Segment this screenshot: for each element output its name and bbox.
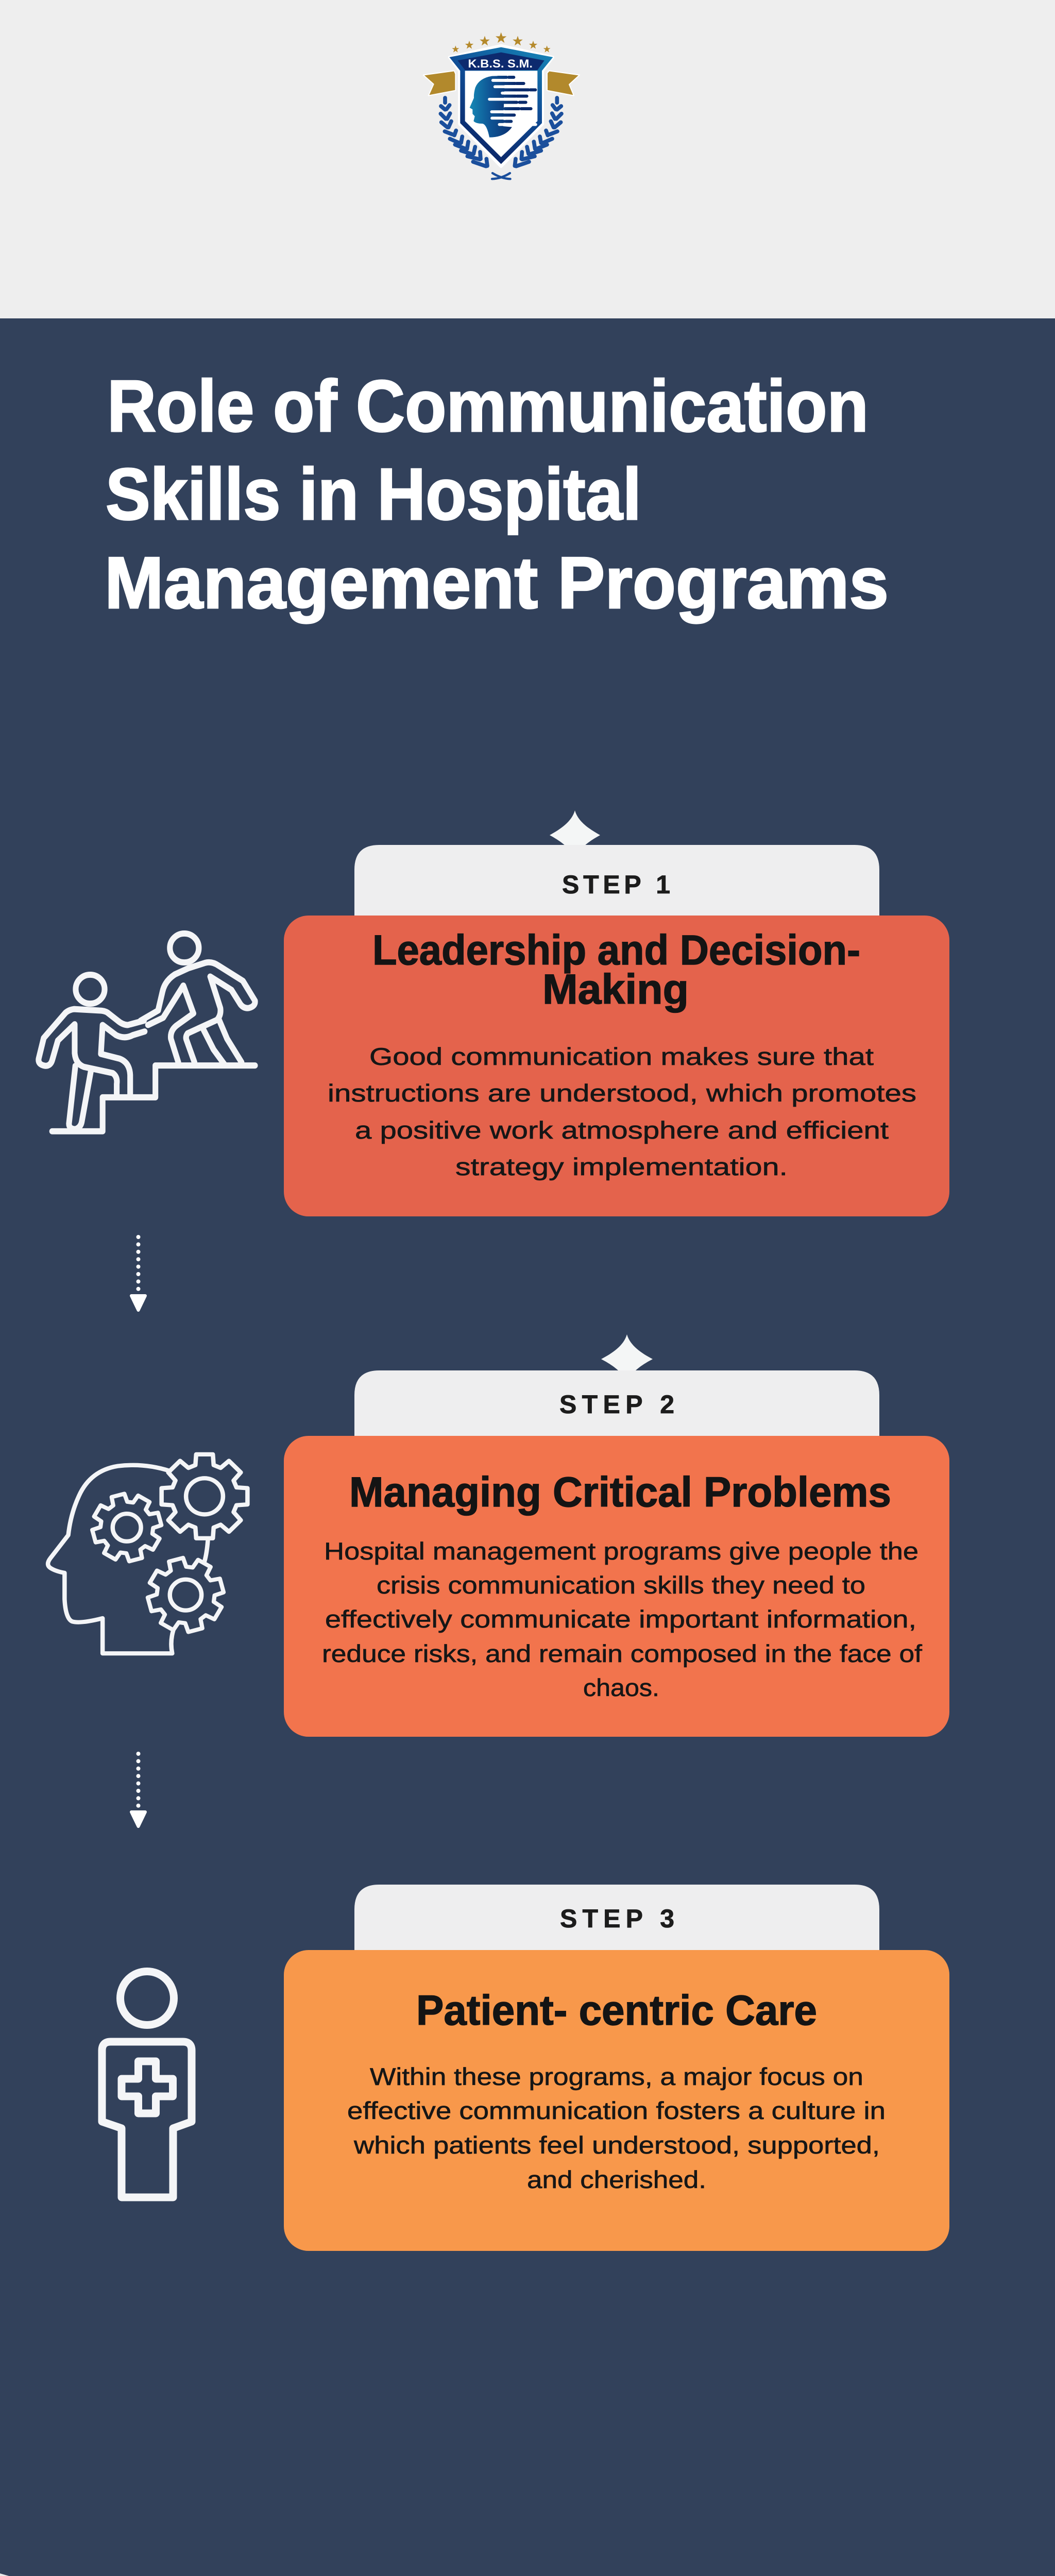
step 2 label: STEP 2 — [559, 1390, 674, 1419]
step 3 label: STEP 3 — [560, 1904, 674, 1933]
step 3 body: which patients feel understood, supported, — [353, 2131, 880, 2159]
step 1 heading: Making — [542, 966, 689, 1013]
step 3 body — [347, 2063, 886, 2193]
logo ribbons — [423, 71, 580, 96]
logo shield interior — [465, 71, 537, 157]
step 1 tab — [354, 845, 879, 916]
arrow: step 2 to step 3 — [131, 1754, 145, 1826]
step 2 body: crisis communication skills they need to — [377, 1571, 865, 1599]
title — [105, 365, 889, 624]
step 1 star — [550, 810, 600, 860]
step 1 card — [284, 916, 949, 1216]
step 3 card — [284, 1950, 949, 2251]
panel: step 2 — [284, 1370, 949, 1737]
title: Role of Communication — [107, 365, 869, 447]
icon: person with medical cross — [102, 1971, 192, 2197]
step 1 body: Good communication makes sure that — [369, 1043, 874, 1070]
header band — [0, 0, 1055, 318]
step 2 tab — [354, 1370, 879, 1436]
step 1 body: instructions are understood, which promotes — [328, 1079, 916, 1107]
step 3 tab — [354, 1885, 879, 1951]
step 2 heading: Managing Critical Problems — [349, 1469, 891, 1516]
step 3 body: and cherished. — [527, 2166, 706, 2193]
step 3 body: effective communication fosters a culture in — [347, 2097, 886, 2124]
arrow: step 1 to step 2 — [131, 1237, 145, 1310]
logo laurels — [440, 98, 561, 179]
step 1 heading: Leadership and Decision- — [372, 927, 860, 974]
panel: step 1 — [284, 845, 949, 1216]
logo stars — [452, 32, 551, 53]
logo: K.B.S.S.M. crest — [423, 32, 580, 179]
step 2 body: chaos. — [583, 1674, 659, 1701]
title: Management Programs — [105, 542, 889, 624]
logo name band — [457, 53, 544, 70]
step 1 body: strategy implementation. — [455, 1153, 788, 1180]
step 1 body — [328, 1043, 916, 1180]
panel: step 3 — [284, 1885, 949, 2251]
logo shield — [449, 47, 553, 164]
step 2 body — [322, 1537, 923, 1701]
step 2 body: reduce risks, and remain composed in the face of — [322, 1640, 923, 1667]
title: Skills in Hospital — [106, 453, 641, 535]
logo white halo — [449, 45, 553, 166]
torn paper edge — [0, 2573, 1055, 2576]
logo name: K.B.S. S.M. — [468, 57, 533, 70]
step 2 body: Hospital management programs give people the — [324, 1537, 918, 1565]
icon: head with gears — [48, 1454, 247, 1653]
step 1 heading — [372, 927, 860, 1013]
step 3 heading: Patient- centric Care — [416, 1987, 817, 2034]
step 2 star — [601, 1334, 653, 1384]
logo head — [470, 76, 536, 138]
step 2 body: effectively communicate important information, — [325, 1605, 916, 1633]
step 1 label: STEP 1 — [562, 870, 670, 899]
step 1 body: a positive work atmosphere and efficient — [355, 1116, 889, 1144]
icon: people climbing stairs — [39, 934, 255, 1131]
step 3 body: Within these programs, a major focus on — [370, 2063, 863, 2090]
step 2 card — [284, 1436, 949, 1737]
